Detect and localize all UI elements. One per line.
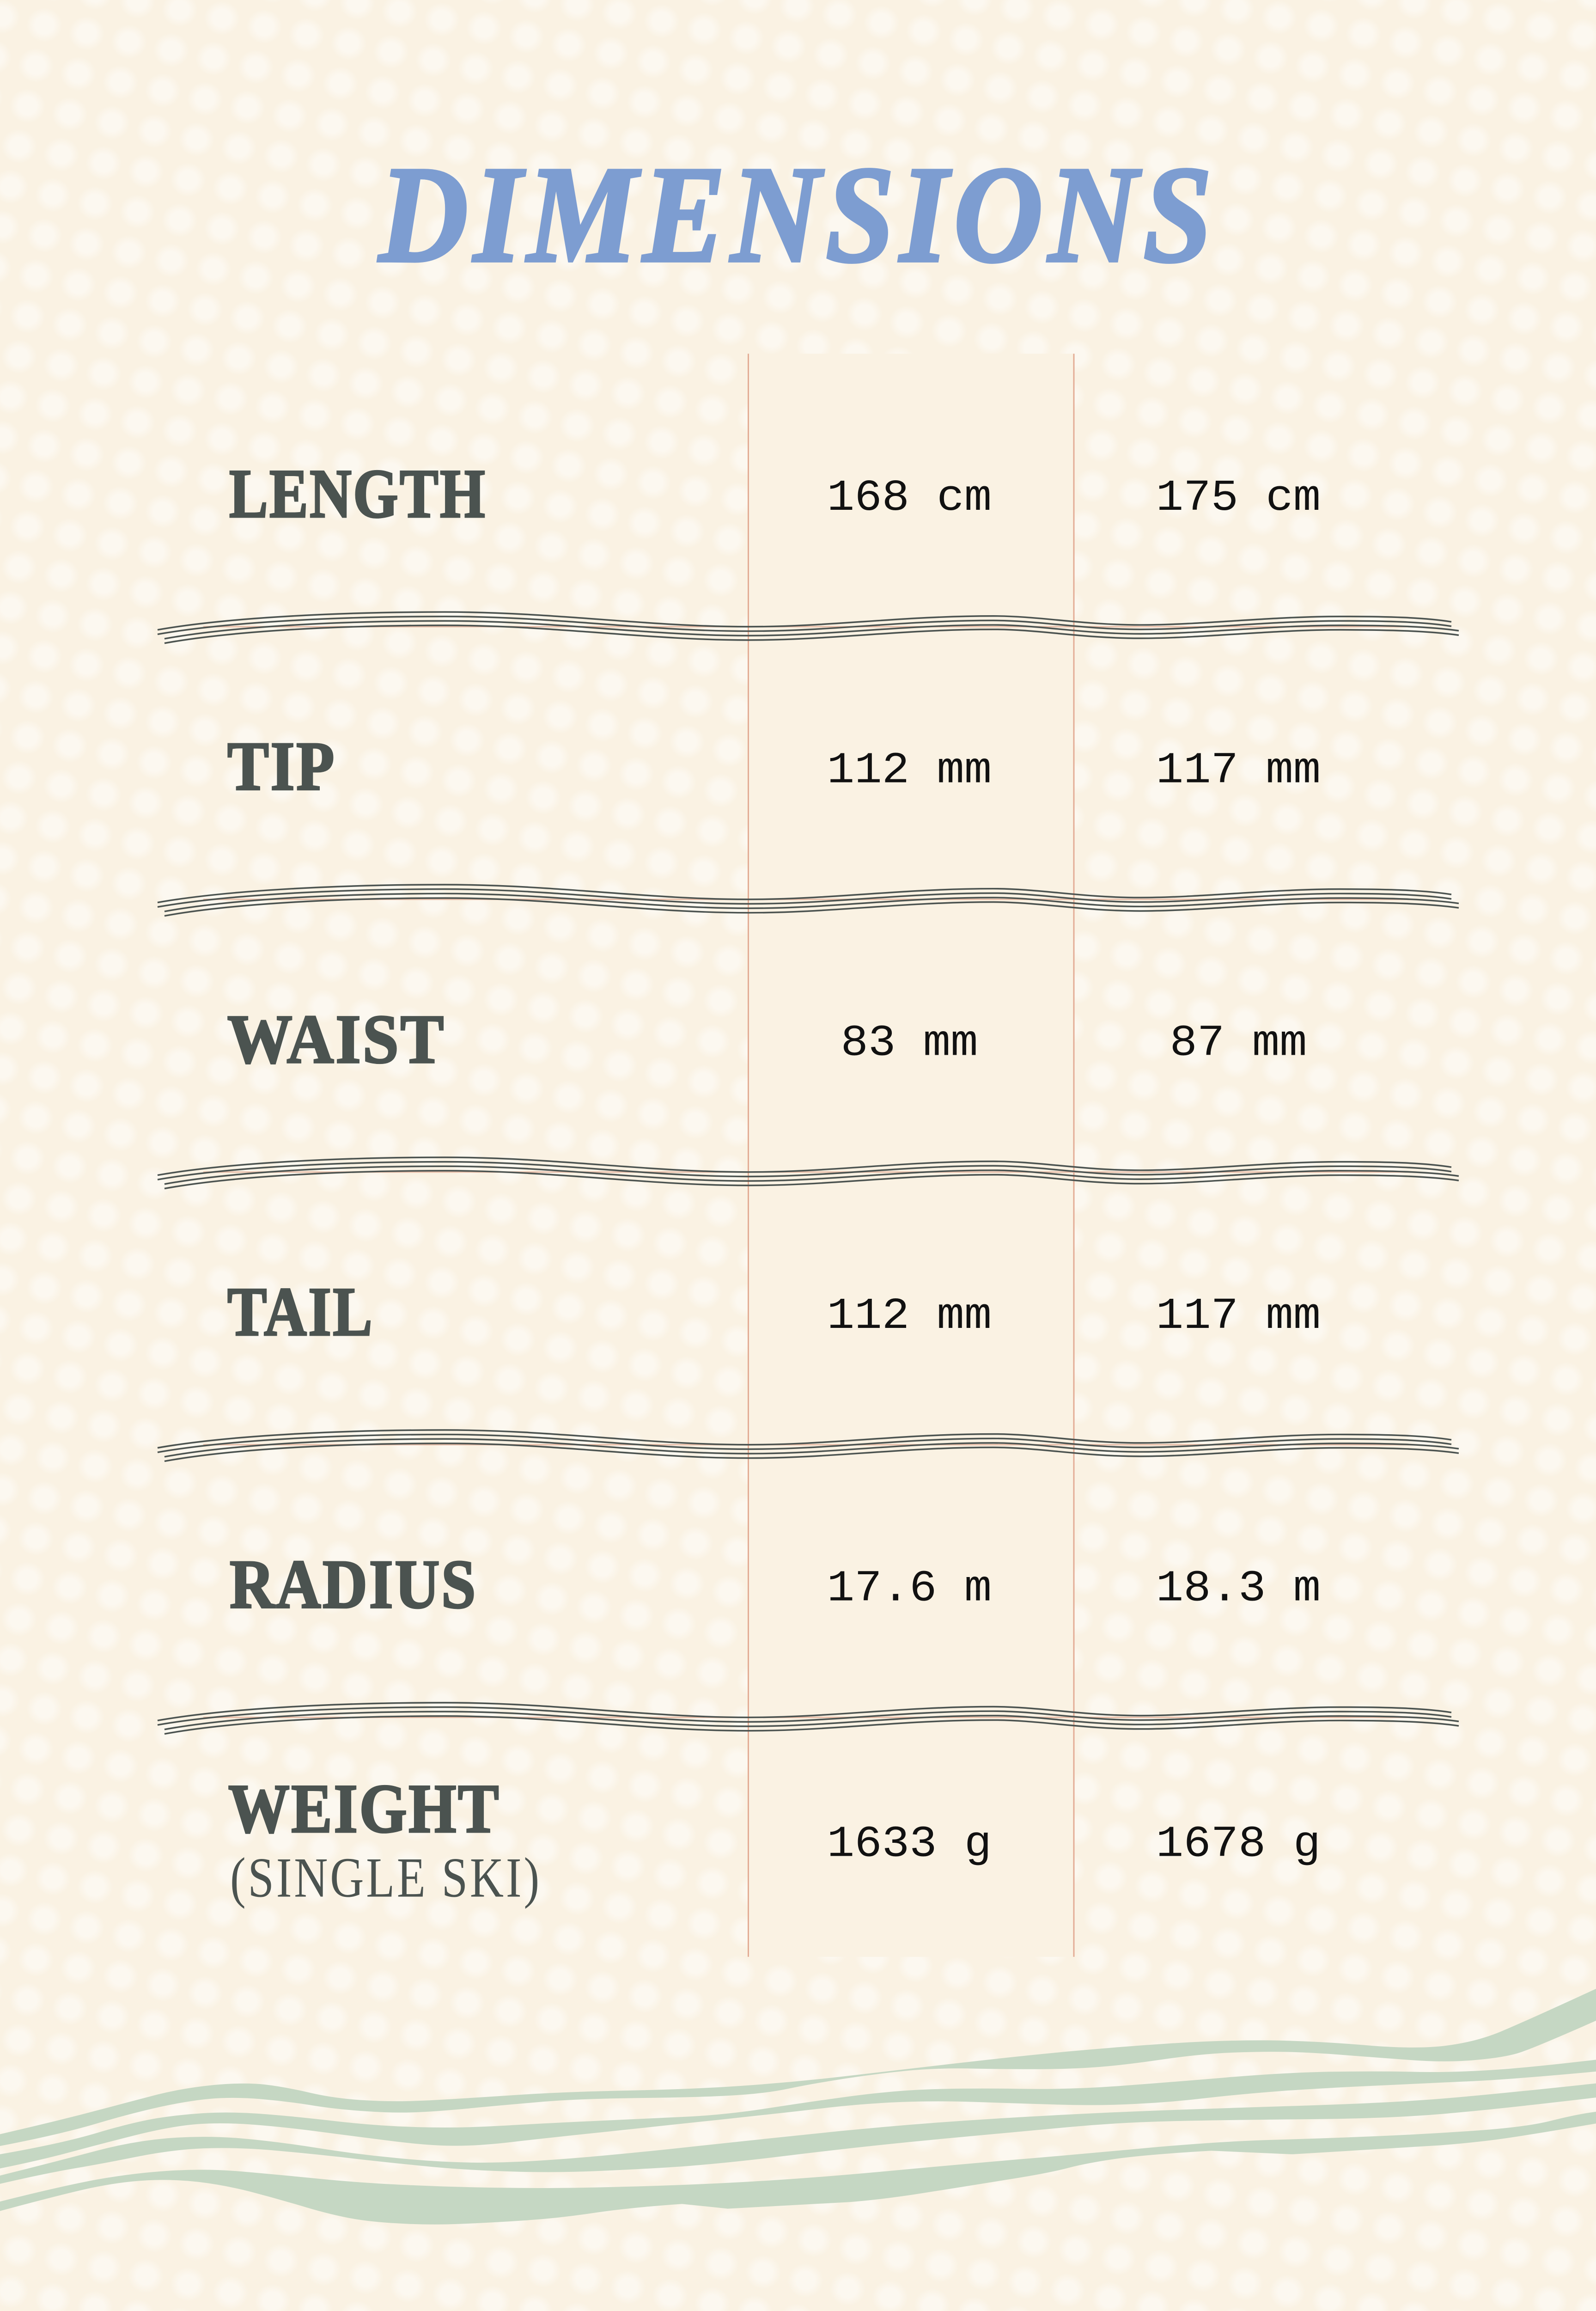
row: tip — [227, 728, 1321, 805]
decorative green waves — [0, 1989, 1596, 2225]
label: length: LENGTH — [229, 455, 487, 532]
value: length 168: 168 cm — [827, 474, 992, 524]
value: weight 168: 1633 g — [827, 1820, 992, 1870]
value: waist 175: 87 mm — [1170, 1019, 1307, 1069]
value: radius 168: 17.6 m — [827, 1564, 992, 1614]
row: waist — [227, 1001, 1307, 1078]
panel: centre column — [748, 354, 1075, 1957]
value: tip 175: 117 mm — [1156, 746, 1321, 796]
label: tip: TIP — [227, 728, 336, 805]
row: tail — [227, 1273, 1321, 1351]
label: radius: RADIUS — [230, 1546, 477, 1623]
label: single ski: (SINGLE SKI) — [230, 1846, 542, 1909]
row divider 1 — [158, 612, 1459, 643]
row: length — [229, 455, 1321, 532]
row divider 2 — [158, 885, 1459, 916]
row: radius — [230, 1546, 1321, 1623]
value: radius 175: 18.3 m — [1156, 1564, 1321, 1614]
row divider 3 — [158, 1157, 1459, 1189]
value: weight 175: 1678 g — [1156, 1820, 1321, 1870]
label: waist: WAIST — [227, 1001, 445, 1078]
value: tip 168: 112 mm — [827, 746, 992, 796]
value: tail 175: 117 mm — [1156, 1291, 1321, 1341]
value: length 175: 175 cm — [1156, 474, 1321, 524]
label: tail: TAIL — [227, 1273, 374, 1351]
row divider 4 — [158, 1430, 1459, 1461]
row: weight — [228, 1770, 1321, 1909]
value: tail 168: 112 mm — [827, 1291, 992, 1341]
label: weight: WEIGHT — [228, 1770, 500, 1847]
value: waist 168: 83 mm — [841, 1019, 978, 1069]
row divider 5 — [158, 1703, 1459, 1734]
title: DIMENSIONS — [377, 138, 1218, 291]
